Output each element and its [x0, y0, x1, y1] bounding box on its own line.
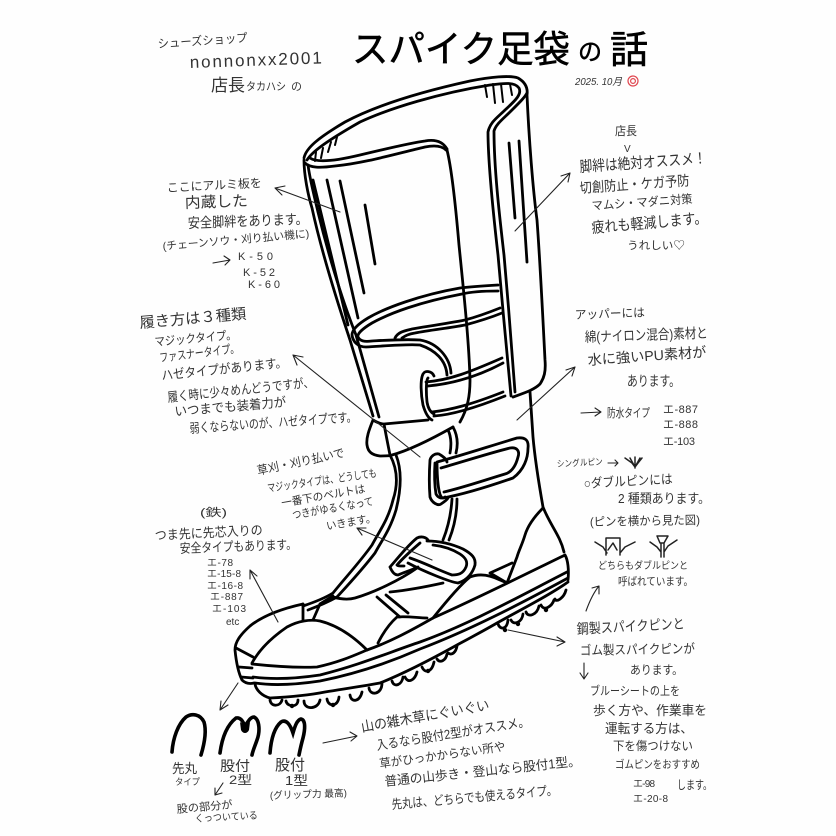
sole, foot panels and toes: [235, 508, 568, 698]
ankle fold: [303, 392, 564, 610]
text: single and double pins: シングルピン: [557, 456, 603, 469]
text: magic type loosens: [256, 446, 377, 533]
arrow: safety gaiter note: [275, 186, 340, 212]
arrow: single pin: [608, 460, 618, 466]
arrow: spike pins: [508, 630, 565, 646]
arrow: K models: [213, 256, 230, 265]
text: steel and rubber spike pins: 歩く方や、作業車を: [593, 703, 707, 718]
text: upper materials: エ-887: [663, 404, 698, 416]
arrow: waterproof type: [581, 408, 601, 416]
boot shaft and cuff: [304, 77, 545, 422]
text: magic type loosens: 一番下のベルトは: [280, 482, 366, 510]
text: joined crotch note: 股の部分が: [176, 797, 233, 816]
text: upper materials: エ-103: [663, 436, 695, 448]
text: upper materials: 水に強いPU素材が: [587, 344, 707, 368]
text: tabi type recommendation: 入るなら股付2型がオススメ。: [375, 714, 531, 753]
shop name heading: [157, 30, 322, 95]
text: steel and rubber spike pins: ブルーシートの上を: [590, 683, 680, 698]
text: steel toe safety type: 安全タイプもあります。: [180, 537, 297, 556]
text: steel and rubber spike pins: あります。: [630, 663, 683, 677]
icon: double pin type A: [595, 538, 635, 555]
text: gaiter recommendation: 脚絆は絶対オススメ！: [579, 150, 707, 176]
text: steel and rubber spike pins: [576, 615, 712, 805]
text: upper materials: 防水タイプ: [607, 405, 650, 420]
text: upper materials: アッパーには: [575, 306, 645, 322]
text: gaiter recommendation: V: [624, 144, 631, 155]
text: single and double pins: [557, 456, 710, 588]
text: aluminium plate gaiter: 安全脚絆をあります。: [188, 211, 308, 231]
date and red stamp: 2025. 10月: [574, 77, 623, 88]
icon: single pin: [625, 457, 642, 468]
text: steel toe safety type: エ-15-8: [207, 569, 241, 580]
text: tabi type recommendation: 先丸は、どちらでも使えるタイプ。: [391, 783, 558, 812]
text: gaiter recommendation: 切創防止・ケガ予防: [579, 172, 690, 196]
toe shape: type 1: 股付: [275, 757, 305, 774]
text: three fastening types: マジックタイプ。: [154, 328, 237, 349]
shop name heading: シューズショップ: [157, 30, 248, 51]
text: steel toe safety type: エ-16-8: [207, 581, 243, 592]
text: aluminium plate gaiter: (チェーンソウ・刈り払い機に): [162, 226, 310, 253]
text: aluminium plate gaiter: K-60: [248, 279, 280, 291]
text: steel and rubber spike pins: します。: [677, 778, 712, 792]
shop name heading: タカハシ: [246, 80, 286, 93]
text: three fastening types: いつまでも装着力が: [174, 394, 287, 419]
shop name heading: nonnonxx2001: [189, 48, 322, 72]
text: magic type loosens: いきます。: [325, 511, 377, 533]
text: gaiter recommendation: 店長: [615, 124, 637, 138]
arrow: double pin: [586, 586, 599, 611]
text: steel toe safety type: (鉄): [200, 505, 227, 519]
text: aluminium plate gaiter: 内蔵した: [185, 193, 248, 212]
arrow: tabi recommendation: [323, 732, 357, 743]
arrow: gaiter recommendation: [515, 173, 570, 231]
text: gaiter recommendation: マムシ・マダニ対策: [591, 191, 693, 213]
toe shape: round toe: タイプ: [175, 777, 200, 787]
arrow: haze type note: [293, 355, 420, 457]
arrow: upper material: [517, 367, 575, 420]
text: three fastening types: ファスナータイプ。: [159, 341, 240, 365]
text: steel toe safety type: つま先に先芯入りの: [154, 522, 263, 543]
text: joined crotch note: くっついている: [195, 810, 258, 825]
toe shape: round toe: [172, 715, 205, 787]
spike pins: [270, 590, 566, 708]
text: joined crotch note: [176, 797, 258, 825]
top strap band: [352, 285, 502, 375]
toe shape: type 1: [270, 719, 347, 802]
text: three fastening types: [139, 306, 357, 436]
text: steel and rubber spike pins: 下を傷つけない: [613, 738, 693, 753]
text: steel toe safety type: エ-887: [210, 592, 243, 603]
hook strap on shaft: [421, 358, 505, 420]
text: steel and rubber spike pins: エ-20-8: [633, 794, 668, 805]
arrow: joined crotch: [215, 783, 223, 795]
text: upper materials: エ-888: [663, 419, 698, 431]
text: steel and rubber spike pins: ゴムピンをおすすめ: [615, 757, 700, 771]
text: tabi type recommendation: 山の雑木草にぐいぐい: [360, 697, 491, 735]
middle velcro strap: [429, 438, 528, 505]
text: steel and rubber spike pins: エ-98: [633, 779, 655, 790]
text: aluminium plate gaiter: K-50: [238, 251, 273, 263]
text: magic type loosens: マジックタイプは、どうしても: [267, 467, 377, 495]
text: single and double pins: どちらもダブルピンと: [598, 559, 688, 572]
text: steel toe safety type: エ-78: [207, 558, 233, 569]
lower buckle strap: [390, 537, 475, 583]
text: upper materials: 綿(ナイロン混合)素材と: [585, 325, 708, 345]
toe shape: type 2: 股付: [220, 758, 250, 774]
text: steel toe safety type: etc: [226, 617, 239, 628]
text: upper materials: [575, 306, 708, 448]
text: single and double pins: 呼ばれています。: [618, 575, 693, 588]
text: three fastening types: ハゼタイプがあります。: [161, 355, 288, 383]
text: three fastening types: 弱くならないのが、ハゼタイプです。: [189, 409, 357, 436]
text: magic type loosens: つきがゆるくなって: [291, 494, 374, 522]
text: steel toe safety type: [154, 505, 297, 628]
shop name heading: 店長: [211, 76, 245, 95]
text: three fastening types: 履き方は３種類: [139, 306, 247, 332]
text: magic type loosens: 草刈・刈り払いで: [256, 446, 346, 478]
toe shape: type 2: [220, 717, 259, 787]
boot illustration: [235, 77, 568, 708]
text: gaiter recommendation: うれしい♡: [627, 239, 685, 252]
arrow: toe types: [220, 683, 238, 710]
text: gaiter recommendation: 疲れも軽減します。: [591, 210, 708, 237]
arrow: rubber pin note: [580, 663, 588, 679]
toe shape: type 2: 2型: [229, 773, 252, 787]
title: スパイク足袋: [352, 29, 570, 70]
text: single and double pins: ○ダブルピンには: [583, 471, 673, 491]
arrow: magic type note: [357, 528, 432, 560]
text: gaiter recommendation: [579, 124, 708, 252]
text: aluminium plate gaiter: K-52: [243, 267, 275, 279]
toe shape: round toe: 先丸: [172, 761, 197, 776]
text: steel and rubber spike pins: ゴム製スパイクピンが: [580, 641, 695, 658]
text: tabi type recommendation: 普通の山歩き・登山なら股付1型。: [384, 753, 581, 789]
text: single and double pins: (ピンを横から見た図): [590, 513, 700, 529]
toe shape: type 1: (グリップ力 最高): [270, 786, 347, 802]
toe shape: type 1: 1型: [285, 773, 308, 788]
text: upper materials: あります。: [627, 373, 680, 389]
text: steel and rubber spike pins: 鋼製スパイクピンと: [576, 615, 685, 637]
text: aluminium plate gaiter: ここにアルミ板を: [166, 176, 262, 195]
shop name heading: の: [291, 81, 302, 93]
icon: double pin type B: [650, 536, 677, 557]
text: steel and rubber spike pins: 運転する方は、: [605, 721, 693, 736]
text: steel toe safety type: エ-103: [212, 604, 246, 615]
arrow: toe cap: [250, 570, 278, 622]
title: 話: [610, 30, 648, 72]
text: tabi type recommendation: 草がひっかからない所や: [378, 738, 506, 771]
title: の: [578, 39, 602, 66]
text: aluminium plate gaiter: [162, 176, 310, 291]
text: single and double pins: 2 種類あります。: [618, 491, 710, 506]
text: tabi type recommendation: [360, 697, 581, 812]
text: three fastening types: 履く時に少々めんどうですが、: [167, 375, 315, 405]
